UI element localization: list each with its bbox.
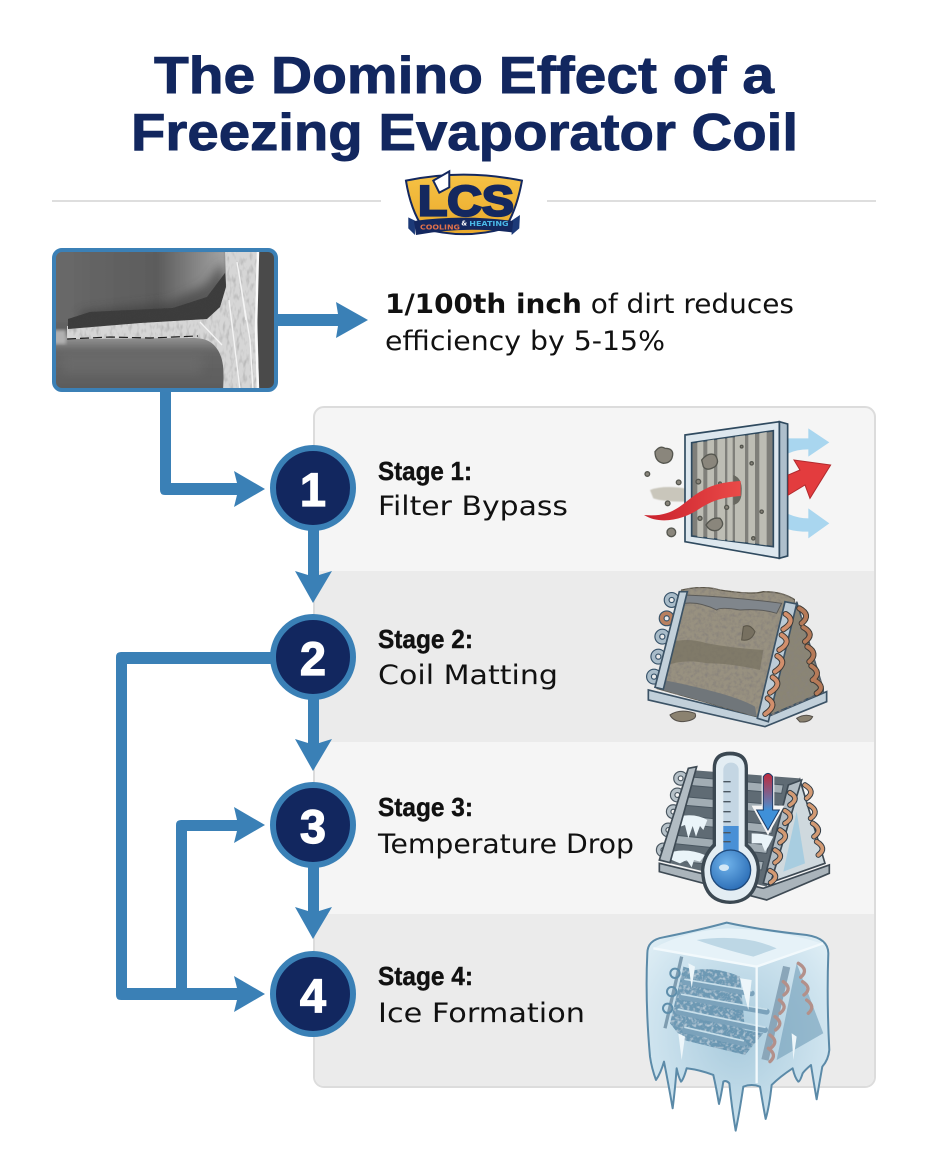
text: stage 4: Stage 4: xyxy=(378,961,473,991)
icon: matted coil xyxy=(648,587,827,727)
text: stage 4: Ice Formation xyxy=(378,998,585,1029)
text: stage 1 xyxy=(378,456,568,522)
text: stage 1: Stage 1: xyxy=(378,456,472,486)
text: stage 2 xyxy=(378,624,558,691)
logo: LCS Cooling & Heating: LCS xyxy=(418,177,514,225)
text: stage 3: Temperature Drop xyxy=(377,829,634,860)
badge: stage 2: 2 xyxy=(300,632,326,685)
text: stage 3: Stage 3: xyxy=(378,792,473,822)
badge: stage 3 xyxy=(273,785,353,865)
icon: coil encased in ice with icicles xyxy=(647,923,829,1131)
arrow: stage 2 feedback to stage 4 xyxy=(116,652,275,1012)
arrow: photo to stage 1 xyxy=(160,392,265,507)
badge: stage 4: 4 xyxy=(300,969,326,1022)
text block: dirt fact: 1/100th inch of dirt reduces xyxy=(385,289,794,320)
badge: stage 2 xyxy=(273,617,353,697)
photo: microscope view of dirt on a fin xyxy=(54,250,276,390)
text: stage 1: Filter Bypass xyxy=(378,491,568,522)
icon: thermometer and chilled coil xyxy=(659,752,829,904)
panel: stages background xyxy=(314,407,875,1087)
title: The Domino Effect of a xyxy=(154,47,775,105)
badge: stage 1 xyxy=(273,448,353,528)
badge: stage 4 xyxy=(273,954,353,1034)
icon: clogged filter with bypass airflow xyxy=(644,422,831,558)
arrow: stage 1 to stage 2 xyxy=(295,528,332,603)
logo: LCS Cooling & Heating: & xyxy=(461,220,467,228)
title xyxy=(131,47,798,162)
text: stage 3 xyxy=(377,792,634,860)
logo: LCS Cooling & Heating: COOLING xyxy=(420,223,460,231)
logo: LCS Cooling & Heating: HEATING xyxy=(469,220,509,228)
text: stage 2: Coil Matting xyxy=(378,660,558,691)
arrow: branch to stage 3 xyxy=(176,807,265,990)
badge: stage 3: 3 xyxy=(300,800,326,853)
arrow: photo to fact xyxy=(278,302,368,338)
arrow: stage 3 to stage 4 xyxy=(295,866,332,939)
text: stage 2: Stage 2: xyxy=(378,624,473,654)
text block: dirt fact: efficiency by 5-15% xyxy=(385,326,665,357)
logo: LCS Cooling & Heating xyxy=(406,171,522,235)
arrow: stage 2 to stage 3 xyxy=(295,698,332,771)
text: stage 4 xyxy=(378,961,585,1029)
badge: stage 1: 1 xyxy=(300,463,326,516)
text block: dirt fact xyxy=(385,289,794,357)
title: Freezing Evaporator Coil xyxy=(131,104,798,162)
